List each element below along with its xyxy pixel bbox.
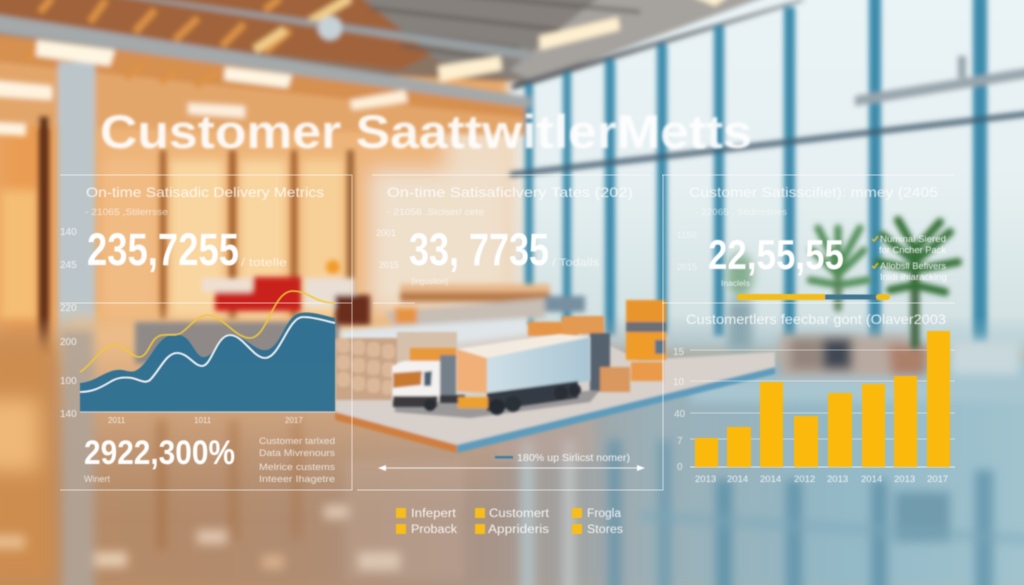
big number: 22,55,55 — [708, 231, 844, 278]
axis labels upper: 200 — [60, 337, 77, 348]
checklist — [872, 234, 947, 282]
back shelf rows — [400, 292, 550, 302]
ceiling joists — [28, 0, 290, 86]
axis labels lower: 1011 — [194, 416, 212, 425]
axis labels upper: 245 — [60, 260, 77, 271]
axis labels: 2001 — [376, 228, 396, 238]
axis labels upper: 100 — [60, 376, 77, 387]
checklist: Inidi Ihiaracking — [880, 272, 947, 282]
panel frame lines — [60, 175, 955, 490]
truck cargo behind cab — [410, 348, 456, 393]
bar chart: 2013 — [827, 474, 848, 485]
pallet stacks — [335, 300, 666, 400]
caption: (ingustion) — [411, 277, 449, 286]
bar chart: 0 — [677, 462, 683, 473]
cab — [392, 361, 440, 400]
big number: 33, 7735 — [409, 224, 549, 275]
subheading: - 21065 ,Stilerrsse — [85, 207, 168, 217]
panel: on-time delivery metrics — [60, 184, 336, 484]
trailer — [457, 349, 487, 393]
bar chart — [673, 331, 955, 485]
window wall — [508, 0, 1024, 350]
bar chart: 2014 — [727, 474, 748, 485]
bar chart: 7 — [677, 436, 683, 447]
axis labels lower — [108, 416, 303, 425]
ceiling — [0, 0, 810, 82]
axis labels lower: 2011 — [108, 416, 126, 425]
reflected mullions — [520, 440, 535, 585]
bar chart: 2014 — [760, 474, 781, 485]
heading: On-time Satisaficlvery Tates (202) — [387, 184, 633, 200]
subheading: - 21056 ,Stciser/ cete — [387, 207, 484, 217]
axis labels lower: 2017 — [285, 416, 303, 425]
side notes: Data Mivrenours — [259, 448, 336, 458]
legend: Customert — [489, 508, 550, 520]
caption: Inaclels — [721, 278, 750, 288]
bar chart: 2013 — [695, 474, 716, 485]
checklist: Numinal Siered — [880, 234, 946, 244]
bar chart: 40 — [674, 409, 686, 420]
big percentage: 2922,300% — [84, 434, 235, 472]
bar chart: 2017 — [927, 474, 948, 485]
pillar — [58, 62, 95, 492]
axis labels upper — [60, 227, 77, 420]
unit label: / Todalls — [552, 257, 600, 269]
axis labels: 2015 — [677, 262, 697, 272]
progress bar — [737, 294, 890, 300]
title: Customer SaattwitlerMetts — [100, 105, 752, 158]
panel: customer satisfaction summary — [673, 184, 955, 485]
side notes: Customer tarlxed — [259, 436, 335, 446]
bar chart: 2013 — [894, 474, 915, 485]
axis labels — [376, 228, 399, 270]
axis labels: 1150 — [677, 230, 696, 240]
legend: Frogla — [587, 508, 622, 520]
bar chart: 2012 — [794, 474, 815, 485]
floor light reflections — [95, 552, 127, 567]
window mullions — [525, 0, 987, 345]
hanging bar — [855, 66, 1024, 106]
legend: Proback — [411, 524, 457, 536]
checklist: for Cncher Pack — [879, 245, 947, 255]
axis labels upper: 140 — [60, 227, 77, 238]
checklist: Allobsll Befivers — [880, 261, 947, 271]
bar chart: 2014 — [861, 474, 882, 485]
platform — [335, 322, 775, 445]
axis labels: 2015 — [379, 260, 399, 270]
bar chart: 15 — [673, 347, 685, 358]
big number: 235,7255 — [87, 224, 239, 275]
heading: On-time Satisadic Delivery Metrics — [86, 184, 324, 200]
axis labels upper: 140 — [60, 409, 77, 420]
caption: Winert — [84, 474, 111, 484]
side notes: Inteeer Ihagetre — [259, 474, 335, 484]
orange truck in distance — [626, 300, 666, 322]
unit label: / totelle — [241, 257, 287, 269]
main ceiling beams — [110, 0, 530, 60]
axis labels — [677, 230, 697, 272]
legend — [396, 508, 623, 536]
legend: Stores — [587, 524, 623, 536]
side notes: Melrice custems — [259, 462, 336, 472]
plant: centre — [810, 228, 868, 308]
axis labels upper: 220 — [60, 303, 77, 314]
floor — [0, 300, 1024, 585]
heading: Customer Satisscifiet): mmey (2405 — [689, 184, 938, 200]
furniture and plants on the right — [690, 253, 1024, 402]
icon: double arrow — [378, 465, 645, 471]
heading: feedback chart: Customertlers feecbar gont (Olaver2003 — [686, 311, 946, 327]
plant: right — [878, 220, 958, 345]
ceiling lights — [36, 40, 115, 66]
bar chart: 10 — [673, 377, 685, 388]
legend: Apprideris — [488, 524, 549, 536]
range note: 180% up Sirlicst nomer) — [517, 452, 630, 464]
subheading: - 22065 , Stidmrsnes — [695, 207, 788, 217]
panel: on-time delivery rates — [376, 184, 645, 471]
legend: Infepert — [411, 508, 457, 520]
area chart — [80, 291, 335, 412]
warm sofa and red block behind chart — [135, 260, 370, 364]
truck shadow — [395, 390, 600, 418]
window transom — [510, 110, 1024, 177]
scene: loading platform with truck and cargo — [335, 284, 775, 453]
side notes — [259, 436, 336, 484]
